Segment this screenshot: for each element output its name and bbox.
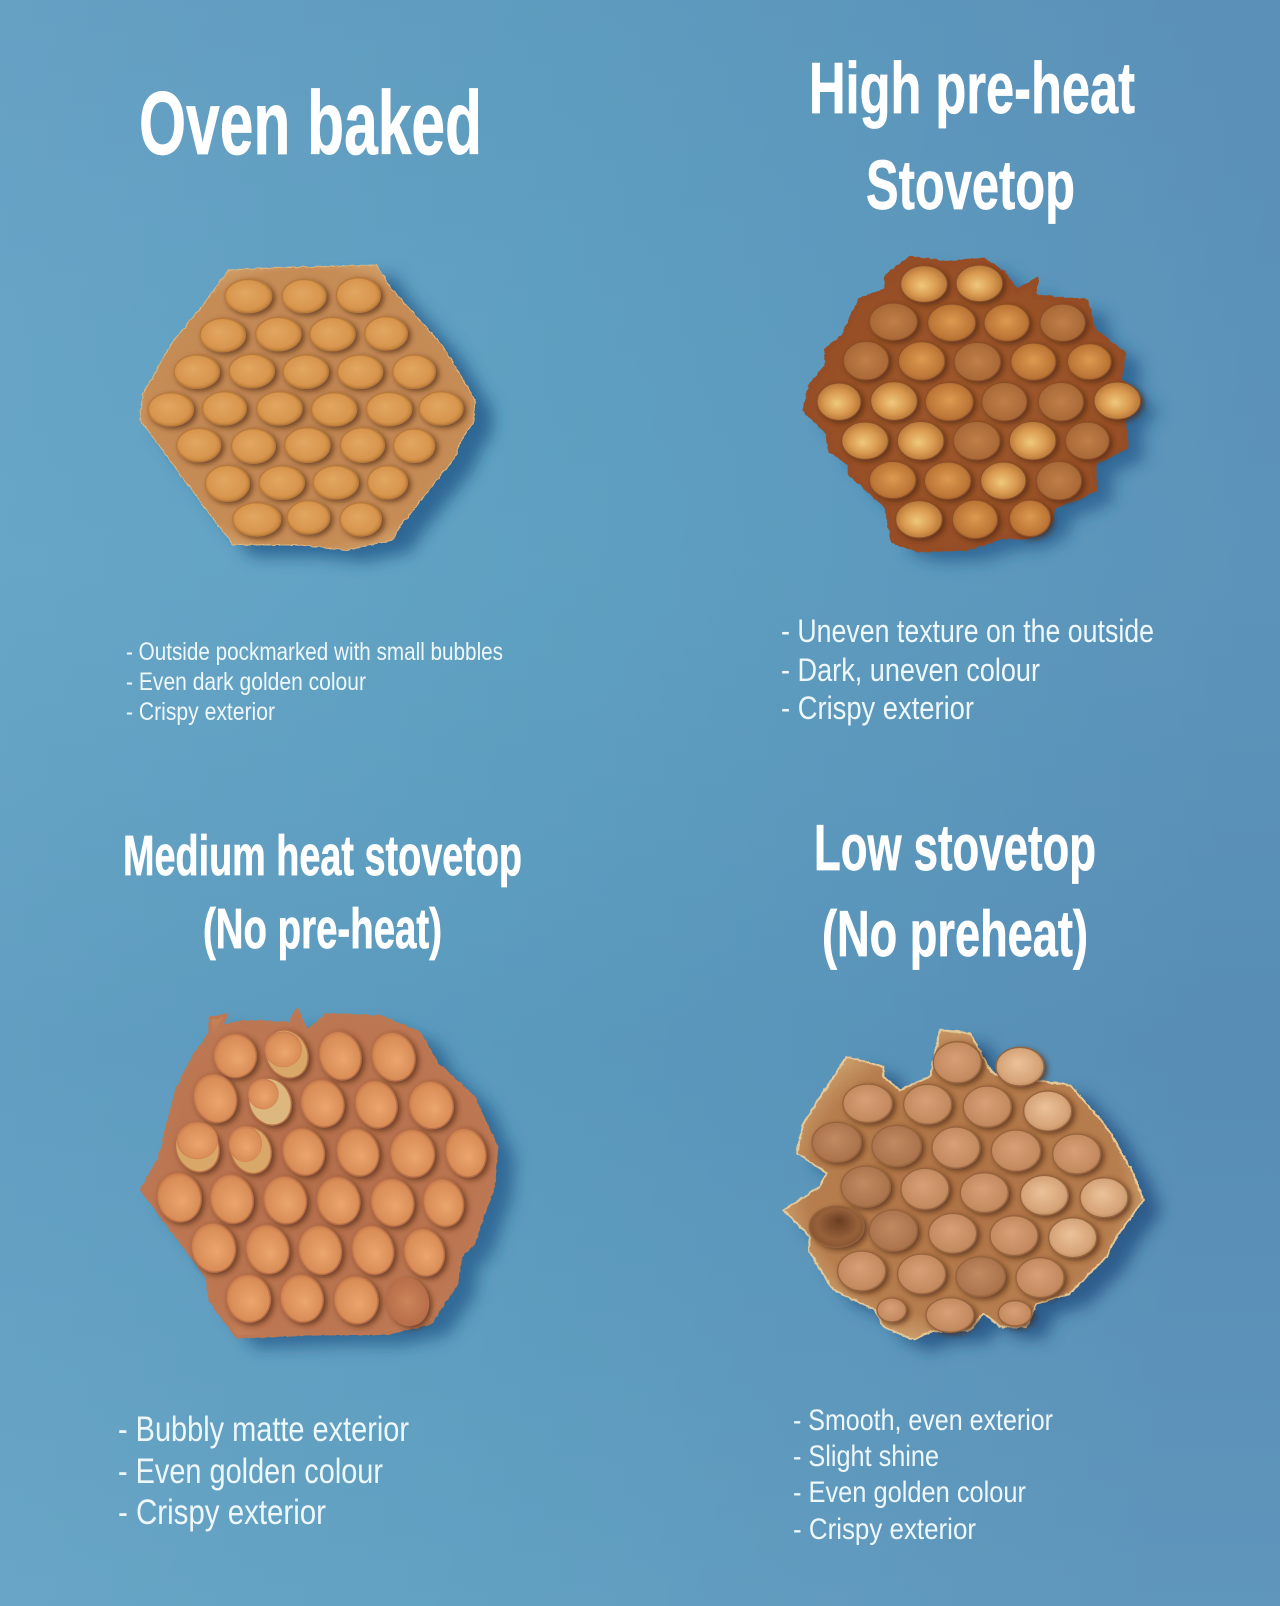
- text block: high pre-heat notes: - Dark, uneven colour: [781, 652, 1040, 688]
- text block: low stovetop notes: - Slight shine: [793, 1440, 939, 1473]
- text block: oven baked notes: - Outside pockmarked with small bubbles: [126, 638, 503, 666]
- text block: medium heat notes: [118, 1410, 409, 1532]
- title: Low stovetop (No preheat): [814, 811, 1096, 970]
- text block: medium heat notes: - Even golden colour: [118, 1452, 383, 1491]
- waffle: oven baked: [140, 265, 493, 562]
- title: Oven baked: Oven baked: [139, 74, 482, 174]
- waffle: high pre-heat stovetop: [805, 258, 1158, 562]
- text block: high pre-heat notes: [781, 613, 1154, 726]
- title: Low stovetop (No preheat): Low stovetop: [814, 811, 1096, 884]
- title: High pre-heat Stovetop: High pre-heat: [809, 49, 1135, 129]
- text block: high pre-heat notes: - Crispy exterior: [781, 690, 974, 726]
- waffle: medium heat stovetop: [142, 1010, 515, 1348]
- text block: medium heat notes: - Crispy exterior: [118, 1493, 326, 1532]
- text block: medium heat notes: - Bubbly matte exterior: [118, 1410, 409, 1449]
- text block: oven baked notes: [126, 638, 503, 726]
- text block: high pre-heat notes: - Uneven texture on the outside: [781, 613, 1154, 649]
- waffle: low stovetop: [783, 1030, 1162, 1352]
- title: Medium heat stovetop (No pre-heat): Medium heat stovetop: [123, 824, 522, 888]
- title: Medium heat stovetop (No pre-heat): (No pre-heat): [203, 897, 442, 961]
- text block: low stovetop notes: - Even golden colour: [793, 1476, 1026, 1509]
- text block: low stovetop notes: [793, 1404, 1053, 1546]
- text block: low stovetop notes: - Crispy exterior: [793, 1513, 976, 1546]
- title: Medium heat stovetop (No pre-heat): [123, 824, 522, 961]
- text block: oven baked notes: - Crispy exterior: [126, 698, 275, 726]
- text block: oven baked notes: - Even dark golden colour: [126, 668, 366, 696]
- title: Low stovetop (No preheat): (No preheat): [822, 897, 1088, 970]
- title: High pre-heat Stovetop: Stovetop: [866, 146, 1075, 224]
- text block: low stovetop notes: - Smooth, even exterior: [793, 1404, 1053, 1437]
- title: High pre-heat Stovetop: [809, 49, 1135, 224]
